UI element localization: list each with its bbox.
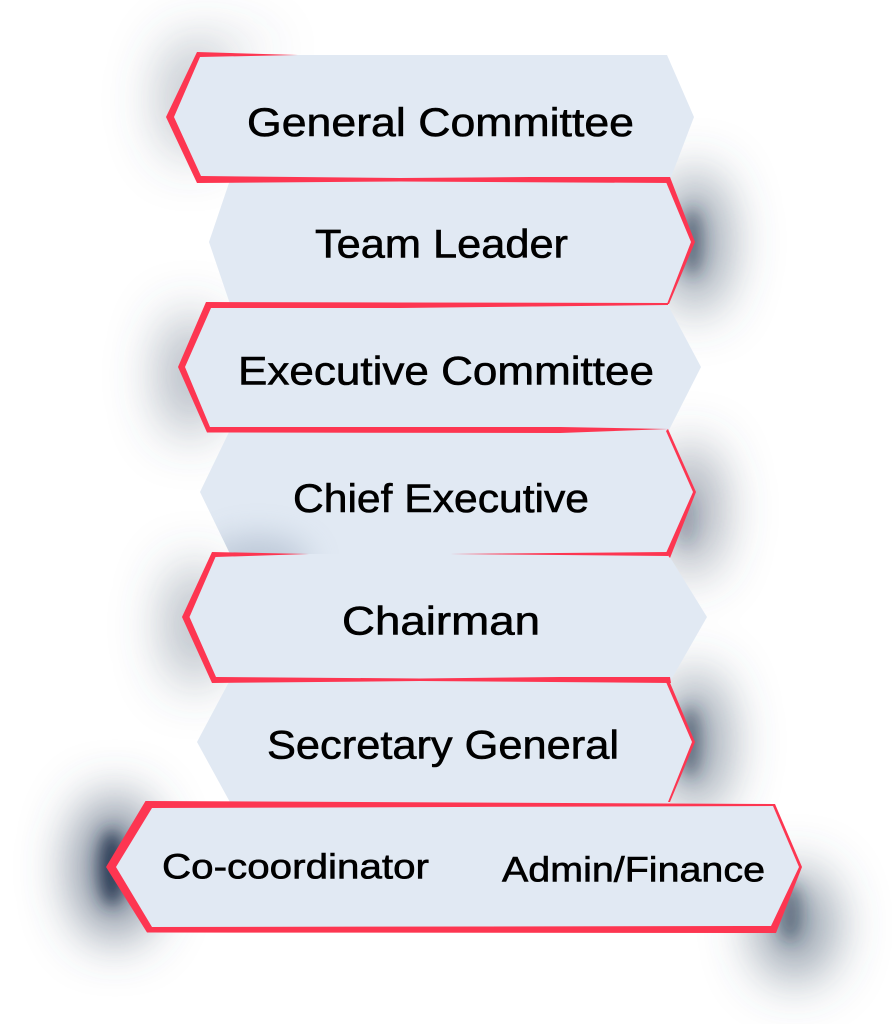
panel: Team Leader [209, 180, 693, 304]
label: Chief Executive [293, 477, 589, 521]
label: Chairman [342, 600, 540, 644]
tight dark layer [99, 208, 802, 942]
panel: Secretary General [197, 680, 693, 804]
panel: Co-coordinator and Admin/Finance [112, 805, 800, 930]
chevron fill [188, 554, 707, 680]
label: Executive Committee [238, 350, 654, 394]
label: General Committee [247, 101, 634, 145]
chevron fill [112, 805, 800, 930]
wide faint layer [73, 34, 835, 980]
chevron fill [172, 55, 694, 180]
panel: General Committee [172, 55, 694, 180]
label: Secretary General [267, 724, 619, 768]
chevron fill [200, 430, 694, 556]
chevron fill [184, 305, 701, 430]
panel: Chief Executive [200, 430, 693, 554]
soft drop shadows [73, 34, 835, 980]
label: Team Leader [315, 222, 568, 266]
label: Admin/Finance: Admin/Finance [502, 850, 765, 890]
inner shadow from the panel below [220, 525, 314, 554]
panel: Chairman [188, 554, 707, 680]
chevron fill [197, 680, 693, 804]
chevron fill [209, 180, 693, 304]
label: Co-coordinator: Co-coordinator [162, 848, 429, 886]
panel: Executive Committee [184, 305, 701, 430]
red outline strokes [106, 52, 802, 933]
